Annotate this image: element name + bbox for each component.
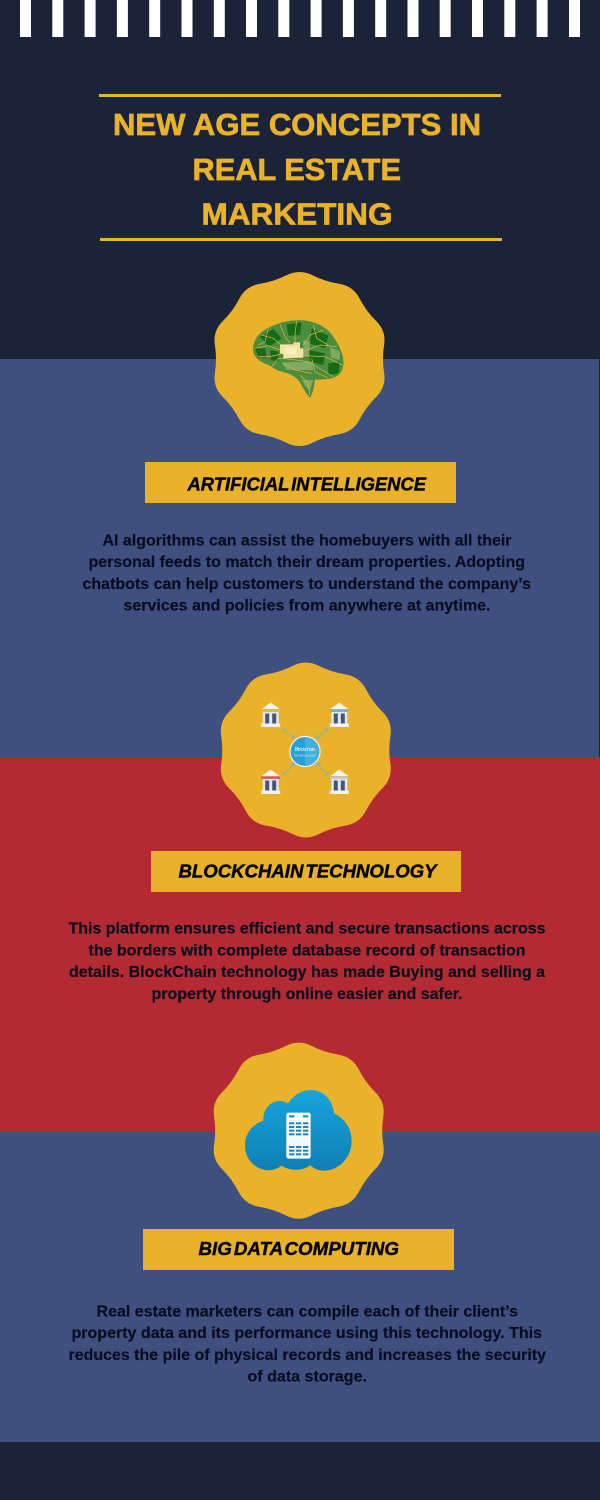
text block: artificial intelligence: services and policies from anywhere at anytime.: [124, 598, 490, 614]
panel: artificial intelligence background: [0, 359, 599, 757]
text block: big data computing: reduces the pile of physical records and increases the security: [68, 1347, 546, 1364]
text block: big data computing: [68, 1304, 546, 1386]
text block: blockchain technology: the borders with complete database record of transaction: [88, 942, 526, 960]
bank top left: [261, 702, 280, 727]
text block: artificial intelligence: [82, 532, 531, 614]
server tower: [286, 1113, 311, 1159]
title block with rules: MARKETING: [202, 196, 392, 232]
text block: artificial intelligence: personal feeds to match their dream properties. Adopting: [88, 554, 525, 571]
text block: big data computing: property data and its performance using this technology. This: [72, 1325, 542, 1342]
bank bottom right: [330, 770, 349, 794]
badge: blockchain: [221, 662, 391, 838]
icon: cloud with server: [245, 1090, 352, 1171]
bank bottom left: [261, 770, 280, 794]
panel: blockchain background: [0, 757, 600, 1132]
arrows between hub and banks: [283, 729, 328, 775]
icon: blockchain network: [261, 702, 349, 794]
badge: artificial intelligence: [214, 272, 385, 446]
title block with rules: NEW AGE CONCEPTS IN: [113, 107, 481, 142]
text block: artificial intelligence: AI algorithms can assist the homebuyers with all their: [102, 532, 512, 550]
text block: big data computing: Real estate marketers can compile each of their client’s: [96, 1304, 518, 1320]
text block: artificial intelligence: chatbots can help customers to understand the company’s: [82, 576, 531, 593]
text block: blockchain technology: details. BlockChain technology has made Buying and selling a: [69, 964, 545, 981]
banner: big data computing: BIG DATA COMPUTING: [198, 1239, 399, 1259]
blockchain hub circle: [290, 736, 320, 766]
banner: blockchain technology: [151, 851, 461, 892]
banner: big data computing: [143, 1229, 454, 1270]
icon: circuit brain: [253, 320, 343, 398]
blockchain hub circle: TECHNOLOGY: [294, 754, 316, 758]
banner: artificial intelligence: ARTIFICIAL INTELLIGENCE: [186, 474, 427, 494]
banner: blockchain technology: BLOCKCHAIN TECHNOLOGY: [178, 862, 439, 882]
badge: big data: [214, 1043, 384, 1219]
panel: navy footer band: [0, 1442, 600, 1500]
white stripes along top edge: [20, 0, 580, 37]
title block with rules: REAL ESTATE: [192, 152, 401, 187]
bank top right: [330, 702, 349, 727]
text block: blockchain technology: property through online easier and safer.: [152, 986, 462, 1003]
panel: navy header background: [0, 0, 600, 359]
text block: big data computing: of data storage.: [248, 1368, 367, 1386]
text block: blockchain technology: This platform ensures efficient and secure transactions across: [68, 920, 546, 938]
panel: big data background: [0, 1132, 600, 1442]
banner: artificial intelligence: [145, 462, 456, 503]
text block: blockchain technology: [68, 920, 546, 1003]
blockchain hub circle: Blockchain: [294, 747, 316, 753]
title block with rules: [99, 94, 502, 241]
